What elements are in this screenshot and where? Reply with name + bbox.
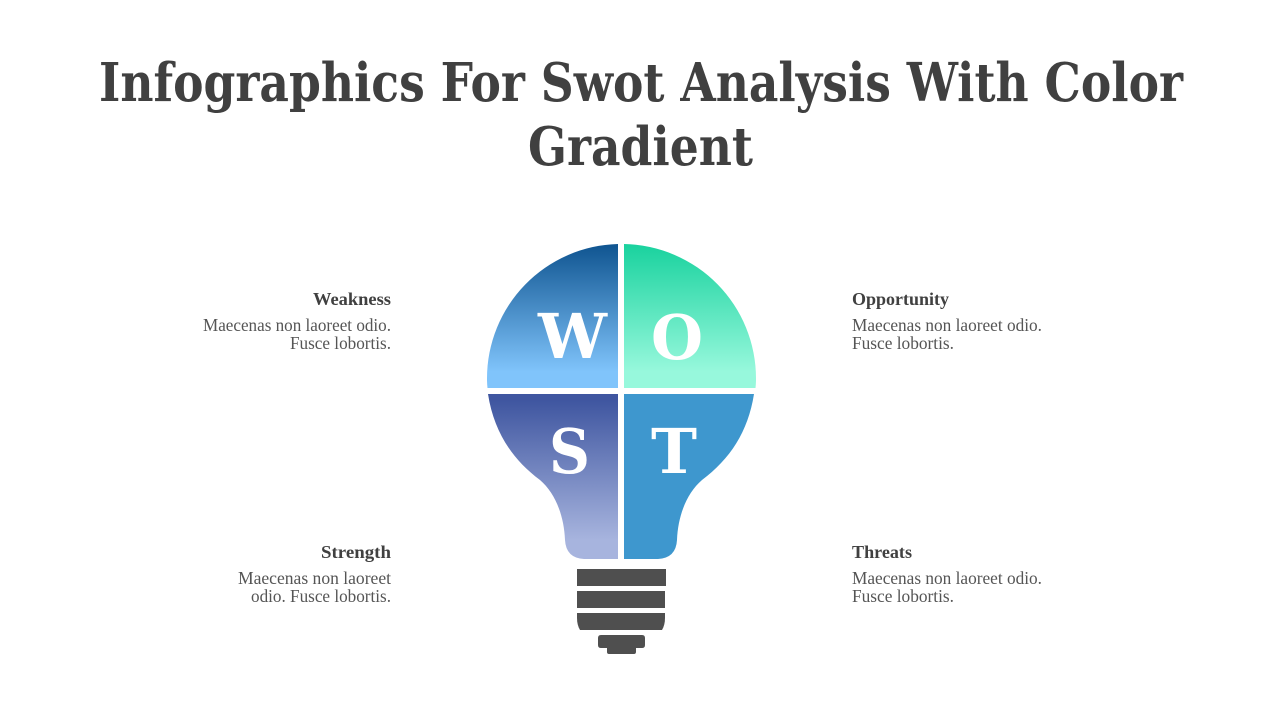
bulb base (577, 569, 666, 654)
text block: weakness: Maecenas non laoreet odio. (203, 315, 391, 335)
text block: threats: Maecenas non laoreet odio. (852, 568, 1042, 588)
quadrant: S strength: S (549, 415, 590, 488)
text block: opportunity: Maecenas non laoreet odio. (852, 315, 1042, 335)
text block: strength (238, 542, 391, 606)
quadrant: T threats: T (651, 415, 697, 488)
text block: strength: odio. Fusce lobortis. (251, 586, 391, 606)
light bulb (487, 244, 756, 654)
quadrant: S strength (488, 394, 618, 559)
text block: opportunity: Fusce lobortis. (852, 333, 954, 353)
text block: weakness (203, 289, 391, 353)
text block: opportunity: Opportunity (852, 289, 949, 309)
text block: strength: Strength (321, 542, 391, 562)
quadrant: T threats (624, 394, 754, 559)
text block: threats: Threats (852, 542, 912, 562)
text block: strength: Maecenas non laoreet (238, 568, 391, 588)
text block: threats: Fusce lobortis. (852, 586, 954, 606)
title: Gradient (528, 116, 753, 178)
quadrant: W weakness: W (537, 300, 608, 373)
quadrant: O opportunity (624, 244, 756, 388)
text block: weakness: Weakness (313, 289, 391, 309)
quadrant: O opportunity: O (651, 301, 703, 374)
quadrant: W weakness (487, 244, 618, 388)
text block: opportunity (852, 289, 1042, 353)
text block: weakness: Fusce lobortis. (290, 333, 391, 353)
text block: threats (852, 542, 1042, 606)
title (99, 52, 1184, 178)
